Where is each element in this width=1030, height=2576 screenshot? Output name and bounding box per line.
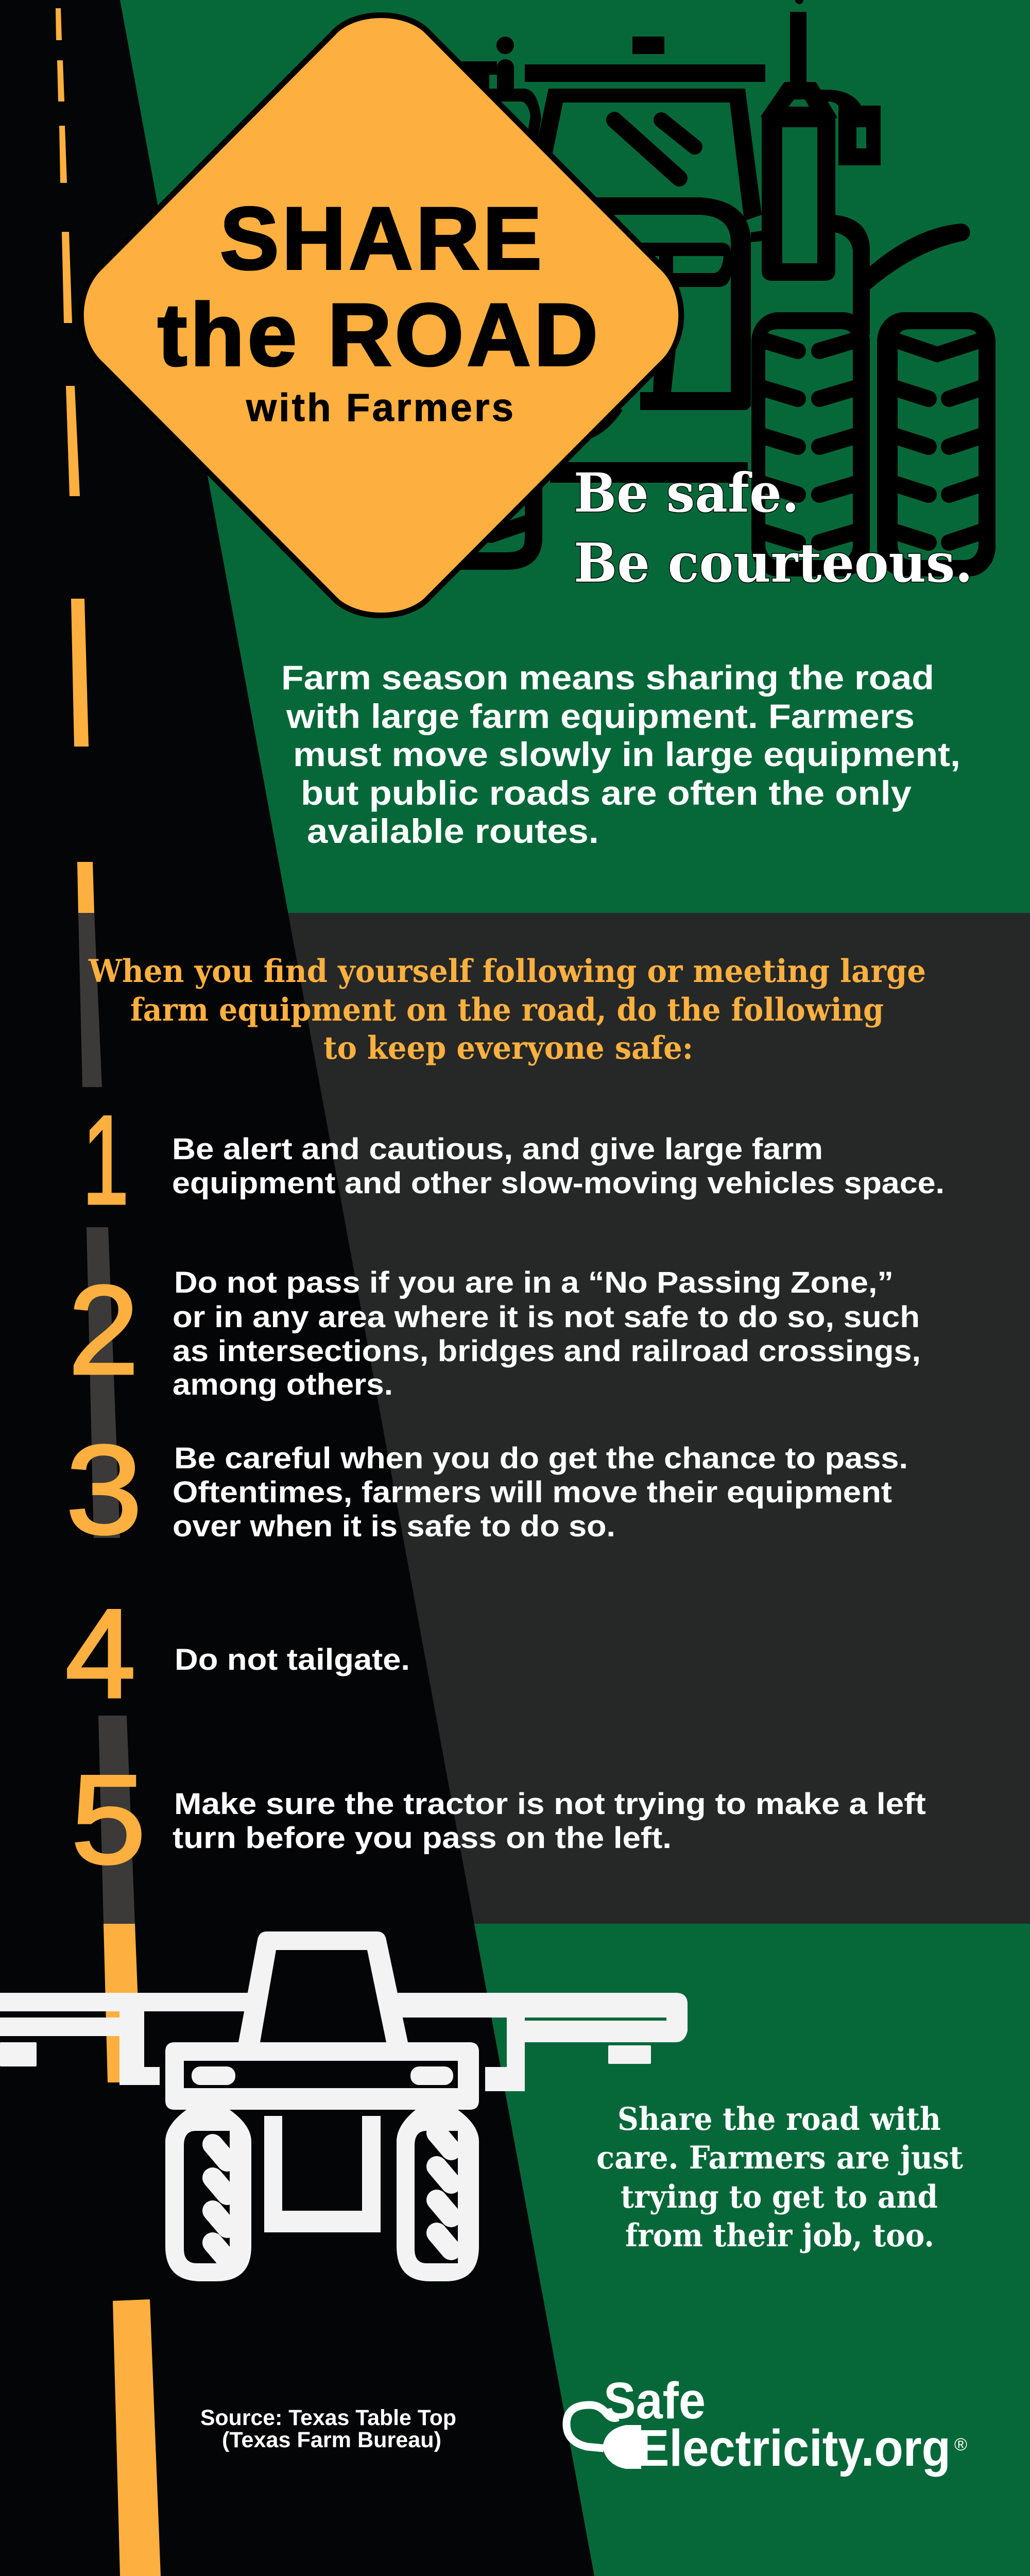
steps heading: [88, 953, 926, 1066]
intro paragraph: Farm season means sharing the road: [281, 658, 934, 697]
step 1: [82, 1089, 945, 1230]
cab: [238, 1931, 408, 2042]
tractor: rear tyre two: [877, 312, 995, 577]
tractor: rear fender and arm: [835, 215, 970, 335]
sign shape: [84, 18, 678, 613]
right wheel: [397, 2110, 479, 2281]
step 3: [66, 1419, 908, 1560]
step 4 text: Do not tailgate.: [175, 1643, 410, 1676]
step 2: [68, 1259, 921, 1401]
panel: safety steps background: [0, 913, 1030, 1924]
step 5: [71, 1749, 926, 1890]
road centre lane dashes: [56, 8, 161, 2576]
step 5 text: [173, 1787, 926, 1855]
closing message: care. Farmers are just: [596, 2140, 963, 2176]
right boom: [398, 1993, 688, 2091]
tractor: hood: [550, 197, 751, 483]
steps heading: farm equipment on the road, do the following: [130, 992, 884, 1028]
closing message: Share the road with: [617, 2101, 941, 2138]
step 2 text: [173, 1266, 921, 1401]
intro paragraph: must move slowly in large equipment,: [293, 735, 960, 773]
intro paragraph: with large farm equipment. Farmers: [286, 697, 915, 735]
closing message: trying to get to and: [621, 2179, 938, 2215]
step 1 text: Be alert and cautious, and give large farm: [172, 1132, 823, 1166]
tractor: rear tyre one: [751, 312, 870, 577]
tractor illustration (top): [453, 0, 995, 577]
source note: (Texas Farm Bureau): [222, 2428, 441, 2452]
number 5: 5: [71, 1749, 146, 1890]
logo text: [604, 2372, 967, 2477]
step 4: [65, 1583, 410, 1724]
logo text: Safe: [604, 2372, 706, 2430]
number 4: 4: [65, 1583, 135, 1724]
intro paragraph: available routes.: [307, 812, 599, 850]
source note: [200, 2405, 456, 2452]
tagline: Be safe.: [574, 461, 799, 524]
number 2: 2: [68, 1259, 139, 1400]
step 2 text: Do not pass if you are in a “No Passing Zone,”: [174, 1266, 894, 1299]
subtitle: with farmers: with Farmers: [246, 386, 513, 430]
step 5 text: turn before you pass on the left.: [173, 1821, 672, 1855]
logo text: Electricity.org: [638, 2419, 951, 2477]
closing message: [596, 2101, 963, 2254]
step 5 text: Make sure the tractor is not trying to make a left: [174, 1787, 926, 1821]
axle bracket: [264, 2116, 381, 2232]
tagline: Be courteous.: [574, 531, 973, 595]
logo cord: [566, 2405, 618, 2448]
tagline: [574, 461, 973, 595]
steps heading: When you find yourself following or meeting large: [88, 953, 926, 990]
closing message: from their job, too.: [625, 2217, 934, 2254]
step 3 text: Be careful when you do get the chance to pass.: [174, 1442, 908, 1475]
step 3 text: Oftentimes, farmers will move their equipment: [173, 1476, 892, 1509]
left boom: [0, 1993, 248, 2085]
number 1: 1: [82, 1089, 129, 1230]
intro paragraph: [281, 658, 960, 850]
step 1 text: equipment and other slow-moving vehicles space.: [172, 1166, 945, 1200]
front body with lights: [165, 2042, 479, 2110]
step 2 text: or in any area where it is not safe to do so, such: [173, 1300, 920, 1334]
step 2 text: among others.: [173, 1368, 393, 1401]
title: the road: the ROAD: [158, 285, 598, 384]
intro paragraph: but public roads are often the only: [301, 774, 912, 812]
step 2 text: as intersections, bridges and railroad crossings,: [173, 1334, 921, 1368]
left wheel: [165, 2110, 251, 2281]
source note: Source: Texas Table Top: [200, 2405, 456, 2430]
steps heading: to keep everyone safe:: [323, 1030, 693, 1066]
step 1 text: [172, 1132, 945, 1200]
tractor: roof and mirrors: [453, 37, 765, 101]
logo: SafeElectricity.org: [566, 2372, 967, 2477]
step 3 text: over when it is safe to do so.: [173, 1510, 615, 1543]
tractor: exhaust stack: [751, 0, 881, 281]
tractor illustration (bottom, front view): [0, 1931, 688, 2281]
road: [0, 0, 594, 2576]
tractor: cab: [492, 89, 762, 221]
title: share: SHARE: [220, 189, 542, 288]
tractor: front wheel: [453, 477, 534, 561]
step 3 text: [173, 1442, 908, 1543]
road sign: title diamond: [84, 18, 678, 613]
logo text: ®: [954, 2435, 967, 2454]
logo plug: [603, 2425, 641, 2469]
number 3: 3: [66, 1419, 142, 1560]
